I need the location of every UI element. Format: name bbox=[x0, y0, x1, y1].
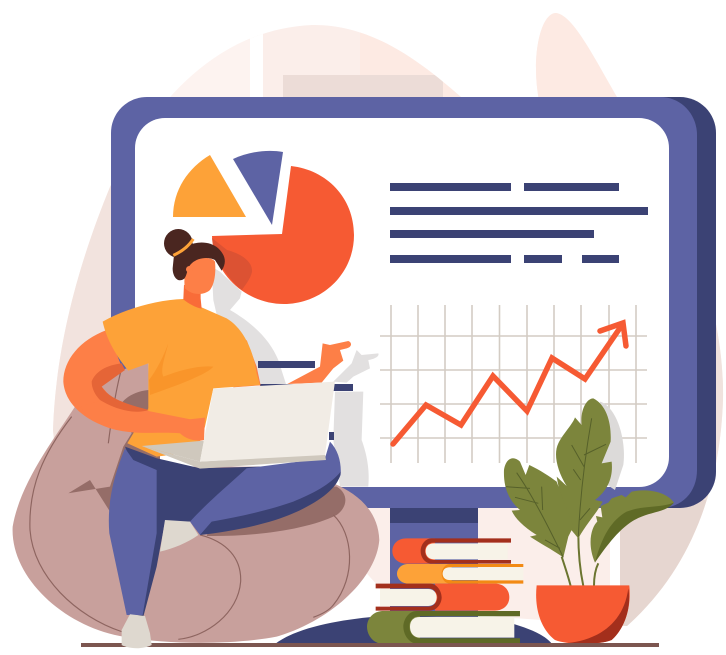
line chart bbox=[380, 305, 647, 463]
monitor screen bbox=[135, 118, 669, 487]
pie chart bbox=[173, 151, 354, 304]
plant pot bbox=[536, 585, 630, 644]
book: orange bbox=[397, 564, 523, 584]
leaf: top bbox=[555, 398, 612, 538]
arm shadow bbox=[92, 363, 149, 412]
neck bbox=[183, 285, 202, 309]
laptop bbox=[142, 382, 335, 469]
books bbox=[367, 538, 523, 644]
plant stems bbox=[562, 533, 598, 586]
forearm bbox=[80, 398, 205, 441]
beanbag shadow bbox=[68, 390, 160, 517]
thigh shadow on beanbag bbox=[207, 487, 345, 536]
woman shadow on screen bbox=[212, 267, 379, 487]
leaf shadow bbox=[600, 402, 624, 490]
laptop base bbox=[142, 441, 204, 462]
plant bbox=[504, 398, 674, 644]
leaf: curved right bbox=[591, 490, 674, 563]
hair band bbox=[173, 239, 193, 255]
thigh underside bbox=[200, 472, 341, 535]
head shadow on pie bbox=[212, 238, 252, 290]
sock bbox=[160, 520, 198, 552]
right arm and pointing hand bbox=[287, 341, 351, 384]
chart grid bbox=[380, 305, 647, 463]
beanbag seams bbox=[30, 368, 350, 639]
front leg bbox=[109, 448, 157, 615]
face bbox=[184, 258, 215, 294]
pie slice: orange bbox=[173, 155, 246, 217]
shirt folds bbox=[149, 343, 213, 395]
monitor frame front bbox=[111, 97, 697, 508]
woman on beanbag bbox=[13, 229, 379, 648]
book: red reversed bbox=[376, 584, 509, 611]
pie slice: blue bbox=[233, 151, 283, 225]
foot bbox=[122, 614, 152, 648]
floor line bbox=[81, 643, 659, 647]
shirt bbox=[103, 299, 260, 457]
monitor base bbox=[275, 615, 552, 644]
book: green bbox=[367, 611, 520, 644]
dark trouser leg bbox=[125, 447, 260, 617]
rising arrow bbox=[393, 323, 626, 444]
thigh bbox=[190, 442, 341, 535]
back arm sleeve bbox=[233, 340, 261, 387]
laptop screen bbox=[200, 382, 335, 462]
upper arm bbox=[63, 330, 133, 430]
leaf: left bbox=[504, 458, 573, 557]
ear bbox=[186, 266, 193, 273]
pie slice: red bbox=[212, 166, 354, 304]
book: red top bbox=[392, 538, 511, 564]
monitor stand bbox=[390, 505, 478, 620]
monitor frame back bbox=[120, 97, 716, 508]
hair bbox=[164, 229, 225, 280]
monitor bbox=[111, 97, 716, 644]
beanbag bbox=[13, 363, 379, 643]
text lines bbox=[258, 183, 648, 440]
